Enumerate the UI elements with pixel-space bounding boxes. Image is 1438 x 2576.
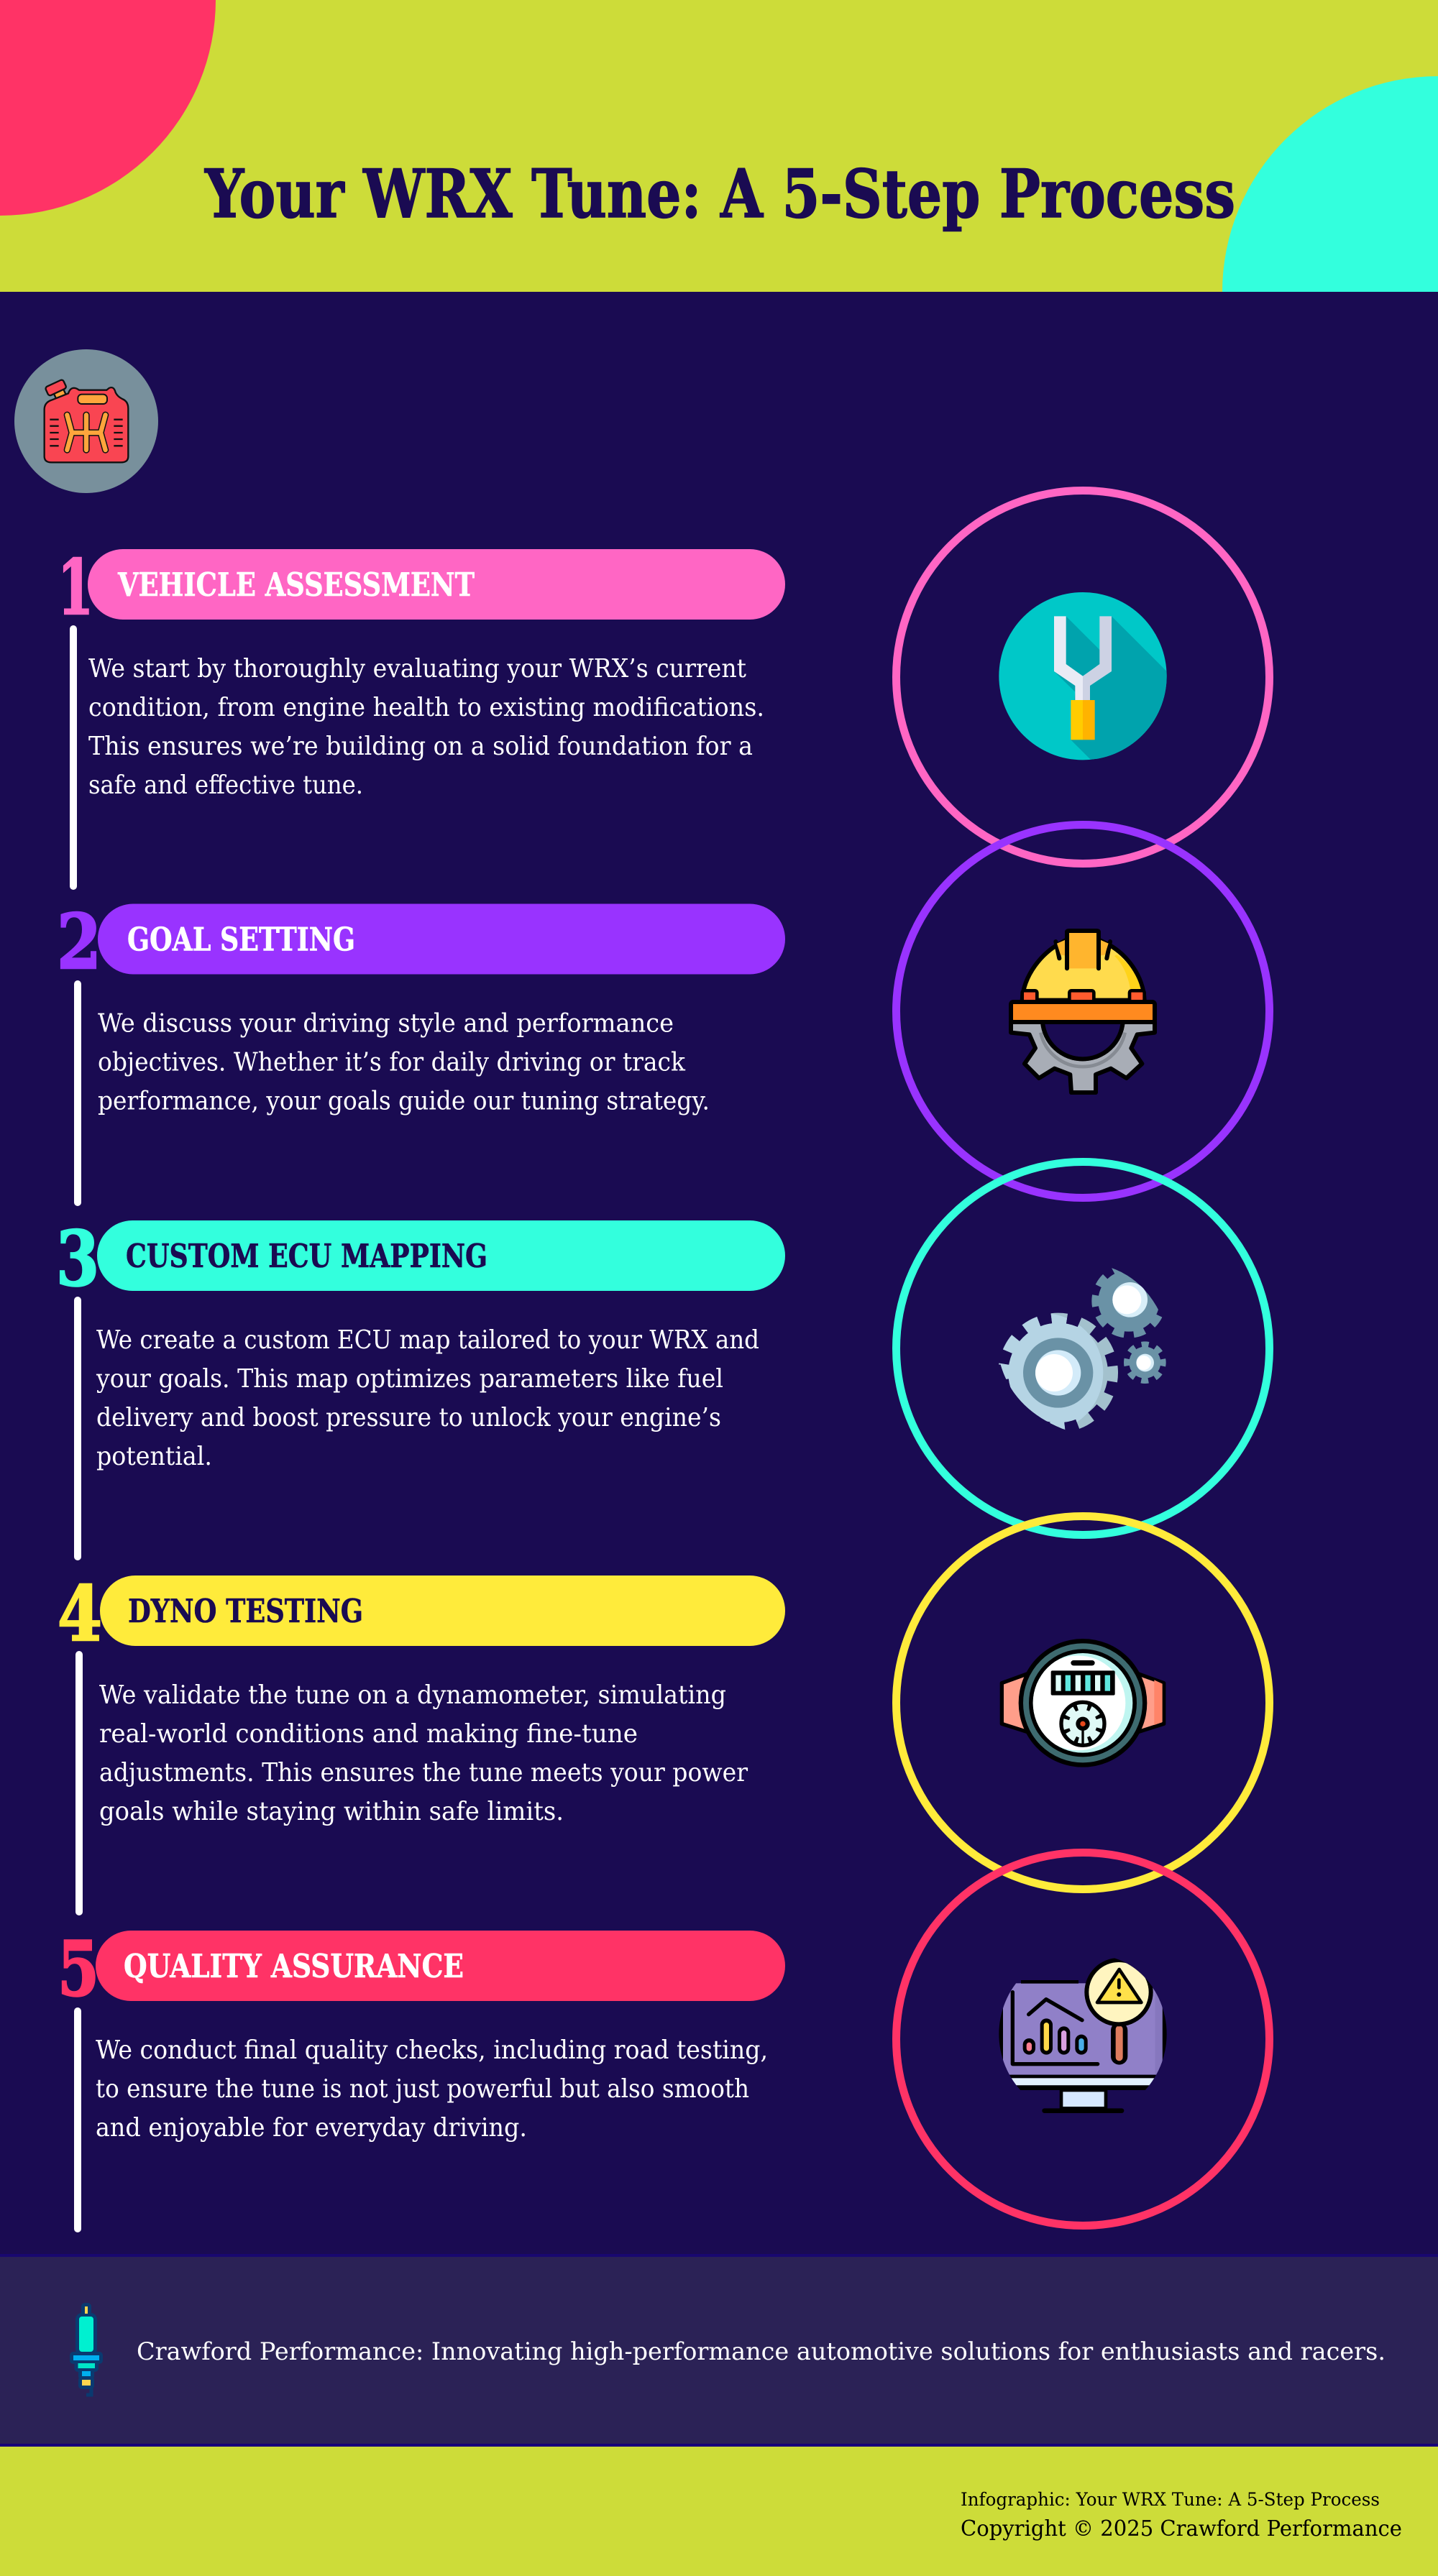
step 4 pill [100, 1576, 785, 1646]
step 1 text: We start by thoroughly evaluating your WRX’s current [88, 654, 746, 684]
footer line 2: Copyright © 2025 Crawford Performance [961, 2516, 1402, 2542]
icon: monitor with warning magnifier [997, 1958, 1170, 2111]
ring: step 1 [896, 490, 1270, 864]
icon: spark plug [73, 2306, 99, 2395]
step 3 text: delivery and boost pressure to unlock your engine’s [96, 1403, 721, 1432]
step 3 bar [74, 1297, 81, 1560]
step 3 pill [97, 1220, 785, 1291]
ring: step 2 [896, 825, 1270, 1197]
step 5 text [96, 2036, 768, 2143]
step 2 number: 2 [57, 897, 101, 986]
step 1 bar [70, 625, 77, 890]
step 4 text: adjustments. This ensures the tune meets your power [99, 1758, 748, 1788]
tagline text: Crawford Performance: Innovating high-performance automotive solutions for enthusiasts and racers. [137, 2337, 1386, 2366]
step 2 text [98, 1009, 710, 1116]
step 4 text: We validate the tune on a dynamometer, simulating [99, 1680, 726, 1710]
step 3 heading: CUSTOM ECU MAPPING [126, 1237, 487, 1275]
step 3 [56, 1214, 785, 1560]
step 1 text: safe and effective tune. [88, 770, 363, 800]
step 1 text: condition, from engine health to existing modifications. [88, 693, 764, 722]
icon: dyno gauge [1002, 1639, 1164, 1767]
footer band [0, 2447, 1438, 2576]
ring: step 3 [896, 1162, 1270, 1535]
step 2 [57, 897, 785, 1206]
step 3 text: your goals. This map optimizes parameters like fuel [96, 1364, 723, 1394]
step 4 heading: DYNO TESTING [128, 1592, 363, 1630]
step 2 text: We discuss your driving style and performance [98, 1009, 674, 1038]
step 5 bar [74, 2007, 81, 2232]
step 4 text: goals while staying within safe limits. [99, 1797, 564, 1826]
step 1 text [88, 654, 764, 800]
step 2 text: objectives. Whether it’s for daily driving or track [98, 1048, 685, 1077]
tagline band [0, 2254, 1438, 2447]
footer line 1: Infographic: Your WRX Tune: A 5-Step Process [961, 2489, 1380, 2511]
icon: fuel can [14, 349, 158, 493]
step 3 text [96, 1325, 759, 1471]
step 5 heading: QUALITY ASSURANCE [124, 1947, 464, 1985]
step 5 number: 5 [58, 1924, 99, 2013]
step 5 text: and enjoyable for everyday driving. [96, 2113, 527, 2143]
step 4 text [99, 1680, 748, 1826]
step 1 text: This ensures we’re building on a solid foundation for a [88, 732, 753, 761]
step 1 number: 1 [58, 543, 93, 632]
step 2 bar [74, 980, 81, 1206]
header band [0, 0, 1438, 292]
title: Your WRX Tune: A 5-Step Process [204, 155, 1235, 233]
step 1 [58, 543, 785, 890]
step 3 number: 3 [56, 1214, 99, 1303]
step 4 bar [75, 1651, 83, 1915]
step 2 heading: GOAL SETTING [127, 920, 355, 959]
step 2 pill [98, 904, 785, 975]
icon: helmet and gear [1011, 931, 1155, 1092]
step 4 text: real-world conditions and making fine-tune [99, 1719, 638, 1749]
step 5 pill [96, 1931, 785, 2001]
step 4 number: 4 [58, 1569, 102, 1658]
step 4 [58, 1569, 785, 1915]
icon: gears [998, 1263, 1167, 1433]
step 1 pill [88, 549, 785, 620]
ring: step 5 [896, 1853, 1270, 2225]
step 3 text: potential. [96, 1442, 212, 1471]
step 5 text: to ensure the tune is not just powerful but also smooth [96, 2074, 749, 2104]
step 2 text: performance, your goals guide our tuning strategy. [98, 1087, 710, 1116]
ring: step 4 [896, 1517, 1270, 1889]
step 5 [58, 1924, 785, 2232]
step 3 text: We create a custom ECU map tailored to your WRX and [96, 1325, 759, 1355]
icon: tuning fork [999, 592, 1167, 760]
step 1 heading: VEHICLE ASSESSMENT [117, 566, 475, 604]
step 5 text: We conduct final quality checks, including road testing, [96, 2036, 768, 2065]
